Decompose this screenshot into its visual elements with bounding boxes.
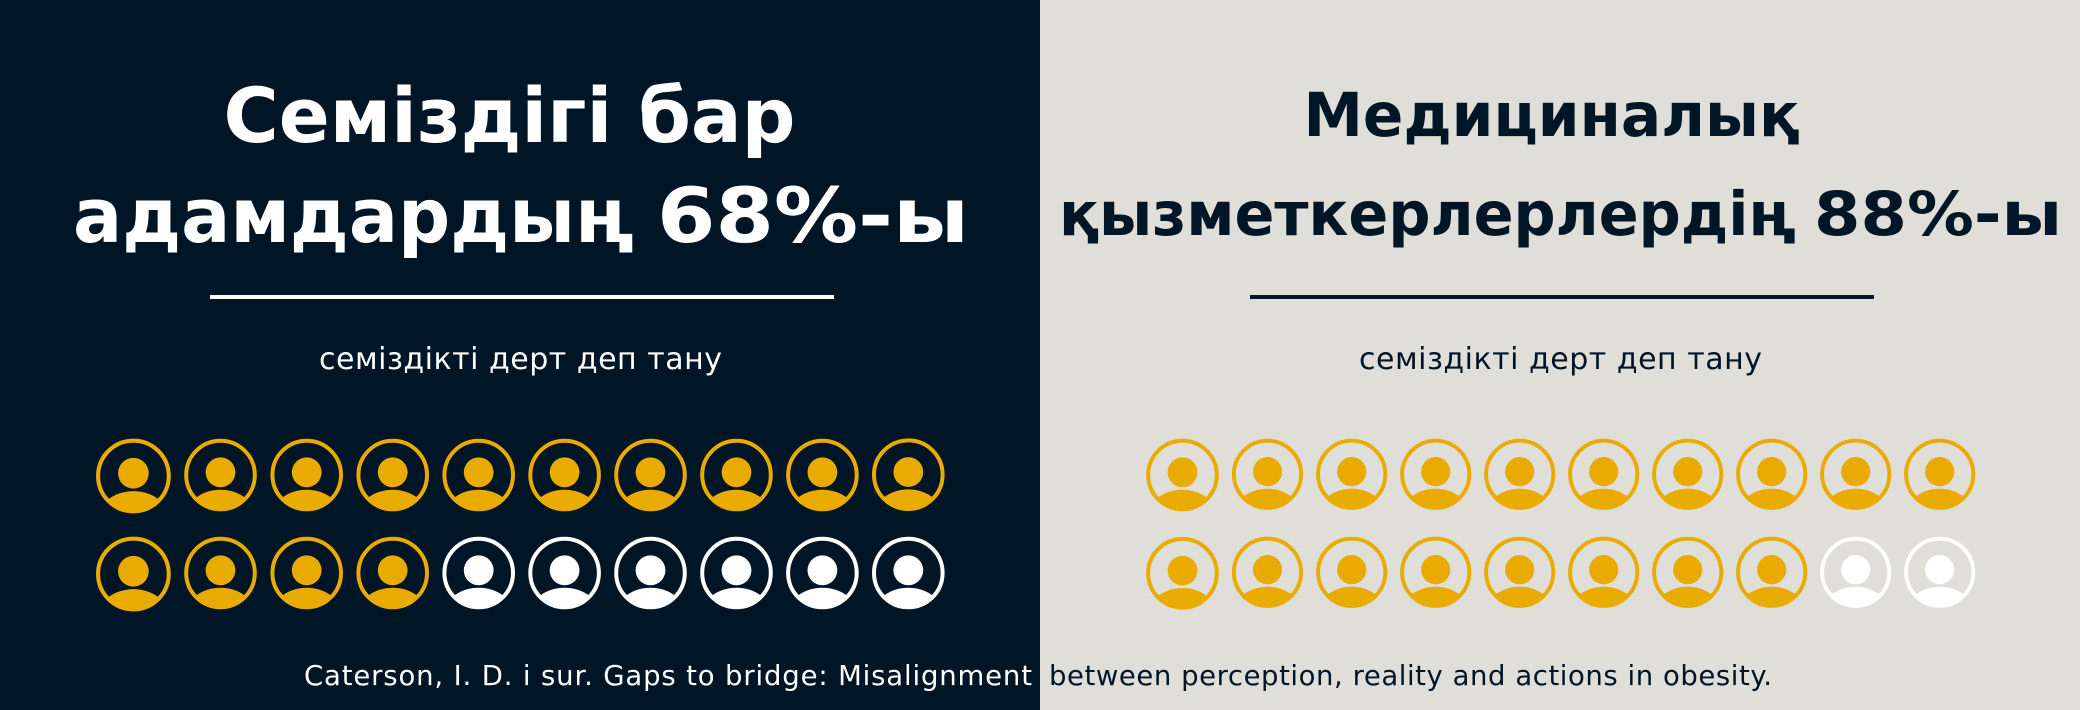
- pictogram: patients 68 percent: [98, 440, 943, 611]
- divider: patients: [210, 295, 834, 299]
- heading: patients: 68%-ы: [657, 171, 969, 260]
- divider: professionals: [1250, 295, 1874, 299]
- panel: patients background: [0, 0, 1040, 710]
- citation: left part: Caterson, I. D. i sur. Gaps to bridge: Misalignment: [304, 660, 1032, 692]
- heading: professionals: Медициналық: [1304, 80, 1800, 151]
- heading: patients: адамдардың: [73, 171, 634, 260]
- heading: professionals: қызметкерлерлердің: [1059, 179, 1796, 250]
- heading: patients: [73, 71, 969, 260]
- subtitle: patients: семіздікті дерт деп тану: [319, 342, 722, 377]
- pictogram: professionals 88 percent: [1148, 441, 1973, 609]
- heading: patients: Семіздігі бар: [224, 71, 796, 160]
- citation: right part: between perception, reality and actions in obesity.: [1049, 660, 1772, 692]
- subtitle: professionals: семіздікті дерт деп тану: [1359, 342, 1762, 377]
- heading: professionals: 88%-ы: [1814, 179, 2062, 250]
- heading: professionals: [1059, 80, 2062, 250]
- panel: professionals background: [1040, 0, 2080, 710]
